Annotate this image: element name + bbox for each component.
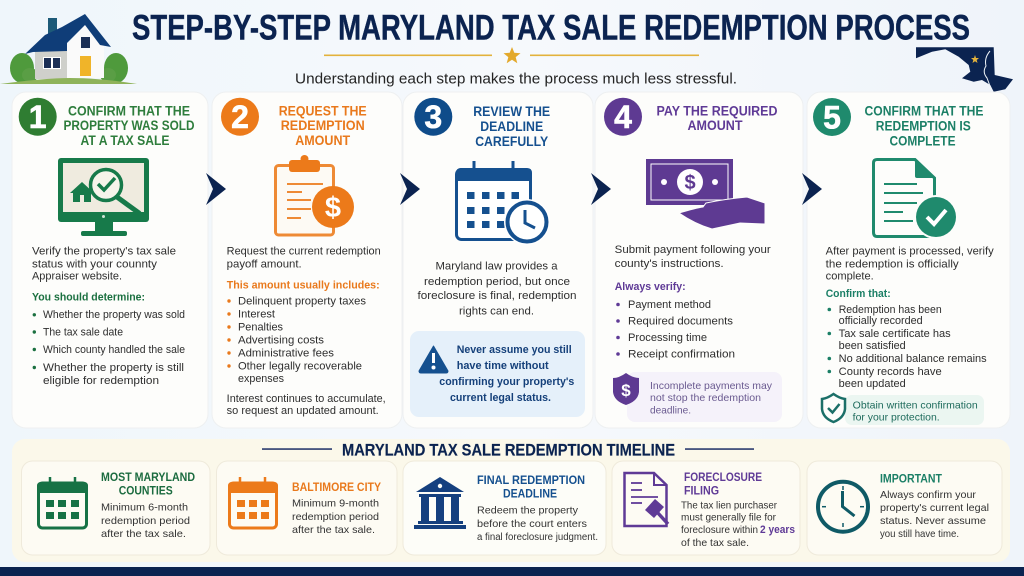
- step 2 list: Penalties: [238, 322, 283, 334]
- icon: house: [0, 14, 137, 84]
- step 3 text: rights can end.: [459, 306, 534, 318]
- step 5 subheading: Confirm that:: [826, 288, 891, 300]
- callout: never assume: current legal status.: [450, 392, 551, 404]
- icon: clipboard with dollar: [276, 155, 354, 235]
- step 4 list: Payment method: [628, 299, 711, 311]
- callout: never assume: Never assume you still: [457, 344, 572, 356]
- card: important: [807, 461, 1002, 555]
- icon: Maryland map: [916, 47, 1013, 92]
- icon: document with gavel: [624, 473, 668, 526]
- step 5 list: officially recorded: [839, 315, 923, 327]
- card text: must generally file for: [681, 512, 777, 524]
- card: final redemption deadline: [403, 461, 606, 555]
- step 4 heading: [656, 104, 778, 133]
- step 4 list: [616, 299, 735, 360]
- step 2 note: so request an updated amount.: [227, 405, 379, 417]
- callout: never assume: confirming your property's: [439, 376, 574, 388]
- card text: Minimum 6-month: [101, 502, 188, 514]
- icon: clipboard with dollar: $: [325, 192, 341, 224]
- step 1 list: eligible for redemption: [43, 375, 159, 387]
- step 4 intro text: [615, 244, 771, 270]
- step 5 number: 5: [823, 99, 841, 135]
- icon: hand with banknote: $: [684, 172, 696, 194]
- step 1 heading: [64, 104, 195, 148]
- step 5 list: [828, 304, 987, 390]
- panel: step 1: [12, 92, 208, 428]
- step 3 text: foreclosure is final, redemption: [418, 290, 577, 302]
- arrow: step 4 to 5: [802, 173, 822, 205]
- step 2 list: Administrative fees: [238, 348, 334, 360]
- subtitle: Understanding each step makes the process much less stressful.: [295, 70, 737, 88]
- callout: never assume: have time without: [457, 360, 549, 372]
- icon: dollar shield: $: [621, 381, 631, 400]
- step 2 heading: REDEMPTION: [281, 118, 365, 133]
- step 5 heading: REDEMPTION IS: [876, 118, 971, 134]
- callout: incomplete payments: [613, 372, 782, 422]
- step 1 list: Which county handled the sale: [43, 344, 185, 356]
- step 5 list: Tax sale certificate has: [839, 328, 951, 340]
- step 3 text: Maryland law provides a: [436, 260, 558, 272]
- callout: incomplete payments: deadline.: [650, 406, 691, 416]
- step 4 subheading: Always verify:: [615, 281, 686, 293]
- step 5 intro text: [826, 246, 994, 282]
- callout: written confirmation: [822, 394, 984, 425]
- card text: you still have time.: [880, 529, 959, 540]
- step 1 list: [33, 309, 185, 387]
- card title: FILING: [684, 484, 719, 498]
- card text: Always confirm your: [880, 490, 977, 501]
- step 2 intro text: payoff amount.: [227, 258, 302, 270]
- step 2 list: Delinquent property taxes: [238, 296, 366, 308]
- card text: Minimum 9-month: [292, 498, 379, 510]
- step 5 list: been satisfied: [839, 340, 906, 352]
- step 5 intro text: After payment is processed, verify: [826, 246, 994, 258]
- step 4 intro text: Submit payment following your: [615, 244, 771, 256]
- card title: BALTIMORE CITY: [292, 480, 381, 494]
- step 4 heading: PAY THE REQUIRED: [656, 104, 778, 118]
- callout: written confirmation: for your protection.: [853, 412, 940, 424]
- timeline heading: MARYLAND TAX SALE REDEMPTION TIMELINE: [342, 440, 675, 460]
- arrow: step 3 to 4: [591, 173, 611, 205]
- card text: [880, 490, 989, 540]
- arrow: step 2 to 3: [400, 173, 420, 205]
- step 4 number: [604, 98, 642, 136]
- step 4 number: 4: [614, 99, 632, 135]
- icon: document with check: [874, 158, 958, 239]
- card text: property's current legal: [880, 503, 989, 514]
- step 4 list: Receipt confirmation: [628, 348, 735, 360]
- card title: DEADLINE: [503, 486, 557, 500]
- card text: [101, 502, 190, 540]
- card text: [681, 500, 795, 549]
- panel: step 4: [595, 92, 803, 428]
- panel: step 2: [212, 92, 402, 428]
- icon: clock: [818, 482, 868, 532]
- icon: monitor with magnifier: [58, 158, 149, 236]
- step 1 list: Whether the property is still: [43, 362, 184, 374]
- callout: incomplete payments: not stop the redemption: [650, 393, 761, 404]
- step 4 heading: AMOUNT: [688, 118, 743, 133]
- card text: redemption period: [101, 516, 190, 527]
- arrow: step 1 to 2: [206, 173, 226, 205]
- icon: orange calendar: [228, 477, 278, 528]
- step 2 heading: REQUEST THE: [279, 104, 367, 118]
- card text: after the tax sale.: [101, 529, 186, 540]
- step 5 list: Redemption has been: [839, 304, 942, 316]
- card text: after the tax sale.: [292, 525, 375, 536]
- step 3 heading: CAREFULLY: [475, 134, 548, 149]
- card text: 2 years: [760, 524, 795, 536]
- step 3 number: 3: [424, 99, 442, 135]
- card title: MOST MARYLAND: [101, 470, 195, 484]
- step 1 number: 1: [29, 99, 47, 135]
- callout: incomplete payments: Incomplete payments may: [650, 381, 773, 392]
- card text: [292, 498, 379, 536]
- icon: hand with banknote: [646, 159, 765, 229]
- step 3 number: [414, 98, 452, 136]
- card text: before the court enters: [477, 519, 587, 530]
- step 2 heading: [279, 104, 367, 148]
- step 2 list: expenses: [238, 373, 284, 385]
- step 3 text: redemption period, but once: [424, 276, 570, 288]
- step 3 heading: [473, 104, 550, 149]
- step 5 list: been updated: [839, 378, 906, 390]
- step 1 subheading: You should determine:: [32, 292, 145, 304]
- icon: dollar shield: [613, 373, 639, 405]
- step 2 heading: AMOUNT: [295, 133, 351, 148]
- panel: step 3: [403, 92, 593, 428]
- card title: COUNTIES: [119, 484, 173, 498]
- icon: warning triangle: [419, 346, 448, 373]
- icon: check shield: [822, 394, 845, 422]
- step 5 heading: COMPLETE: [890, 134, 956, 148]
- card text: of the tax sale.: [681, 538, 749, 549]
- step 3 heading: REVIEW THE: [473, 104, 550, 119]
- step 2 list: Interest: [238, 308, 275, 320]
- step 5 list: County records have: [839, 366, 942, 378]
- step 2 list: Other legally recoverable: [238, 360, 362, 372]
- card title: [684, 470, 762, 498]
- step 1 intro text: Verify the property's tax sale: [32, 246, 176, 258]
- step 5 heading: [864, 104, 984, 148]
- card text: a final foreclosure judgment.: [477, 532, 598, 543]
- callout: never assume: [410, 331, 585, 417]
- step 1 intro text: Appraiser website.: [32, 270, 122, 282]
- card: Baltimore City: [216, 461, 397, 555]
- step 1 list: Whether the property was sold: [43, 309, 185, 321]
- card: foreclosure filing: [612, 461, 800, 555]
- card text: Redeem the property: [477, 506, 579, 516]
- step 5 intro text: the redemption is officially: [826, 258, 959, 270]
- step 3 heading: DEADLINE: [480, 119, 543, 134]
- panel: step 5: [807, 92, 1010, 428]
- icon: courthouse: [414, 477, 466, 529]
- step 2 note: [227, 393, 386, 417]
- step 1 heading: AT A TAX SALE: [80, 133, 170, 148]
- card text: [477, 506, 598, 543]
- step 3 text: [418, 260, 577, 318]
- step 2 intro text: Request the current redemption: [227, 246, 381, 258]
- card text: redemption period: [292, 512, 379, 523]
- step 4 intro text: county's instructions.: [615, 258, 724, 270]
- step 2 number: [221, 98, 259, 136]
- step 5 heading: CONFIRM THAT THE: [864, 104, 984, 118]
- step 2 subheading: This amount usually includes:: [227, 280, 380, 292]
- icon: calendar with clock: [456, 161, 550, 245]
- footer bar: [0, 567, 1024, 576]
- card title: [101, 470, 195, 498]
- step 2 list: Advertising costs: [238, 334, 324, 346]
- step 2 intro text: [227, 246, 381, 270]
- card text: The tax lien purchaser: [681, 500, 778, 512]
- panel: timeline: [12, 439, 1010, 562]
- card title: [477, 473, 585, 500]
- card title: IMPORTANT: [880, 472, 943, 486]
- card text: status. Never assume: [880, 516, 986, 527]
- step 2 note: Interest continues to accumulate,: [227, 393, 386, 405]
- step 1 heading: PROPERTY WAS SOLD: [64, 118, 195, 133]
- card: most Maryland counties: [22, 461, 210, 555]
- card text: foreclosure within: [681, 525, 758, 536]
- step 2 number: 2: [231, 99, 249, 135]
- card title: FORECLOSURE: [684, 470, 762, 484]
- step 1 intro text: [32, 246, 176, 282]
- step 4 list: Required documents: [628, 316, 733, 328]
- step 1 number: [19, 98, 57, 136]
- step 2 list: [227, 296, 366, 385]
- step 5 intro text: complete.: [826, 270, 874, 282]
- step 1 heading: CONFIRM THAT THE: [68, 104, 190, 118]
- step 4 list: Processing time: [628, 332, 707, 344]
- title divider with star: [324, 47, 699, 63]
- step 1 list: The tax sale date: [43, 326, 123, 338]
- step 5 list: No additional balance remains: [839, 353, 987, 365]
- step 1 intro text: status with your counnty: [32, 258, 158, 270]
- card title: FINAL REDEMPTION: [477, 473, 585, 487]
- icon: green calendar: [37, 477, 88, 528]
- step 5 number: [813, 98, 851, 136]
- callout: written confirmation: Obtain written confirmation: [853, 400, 978, 412]
